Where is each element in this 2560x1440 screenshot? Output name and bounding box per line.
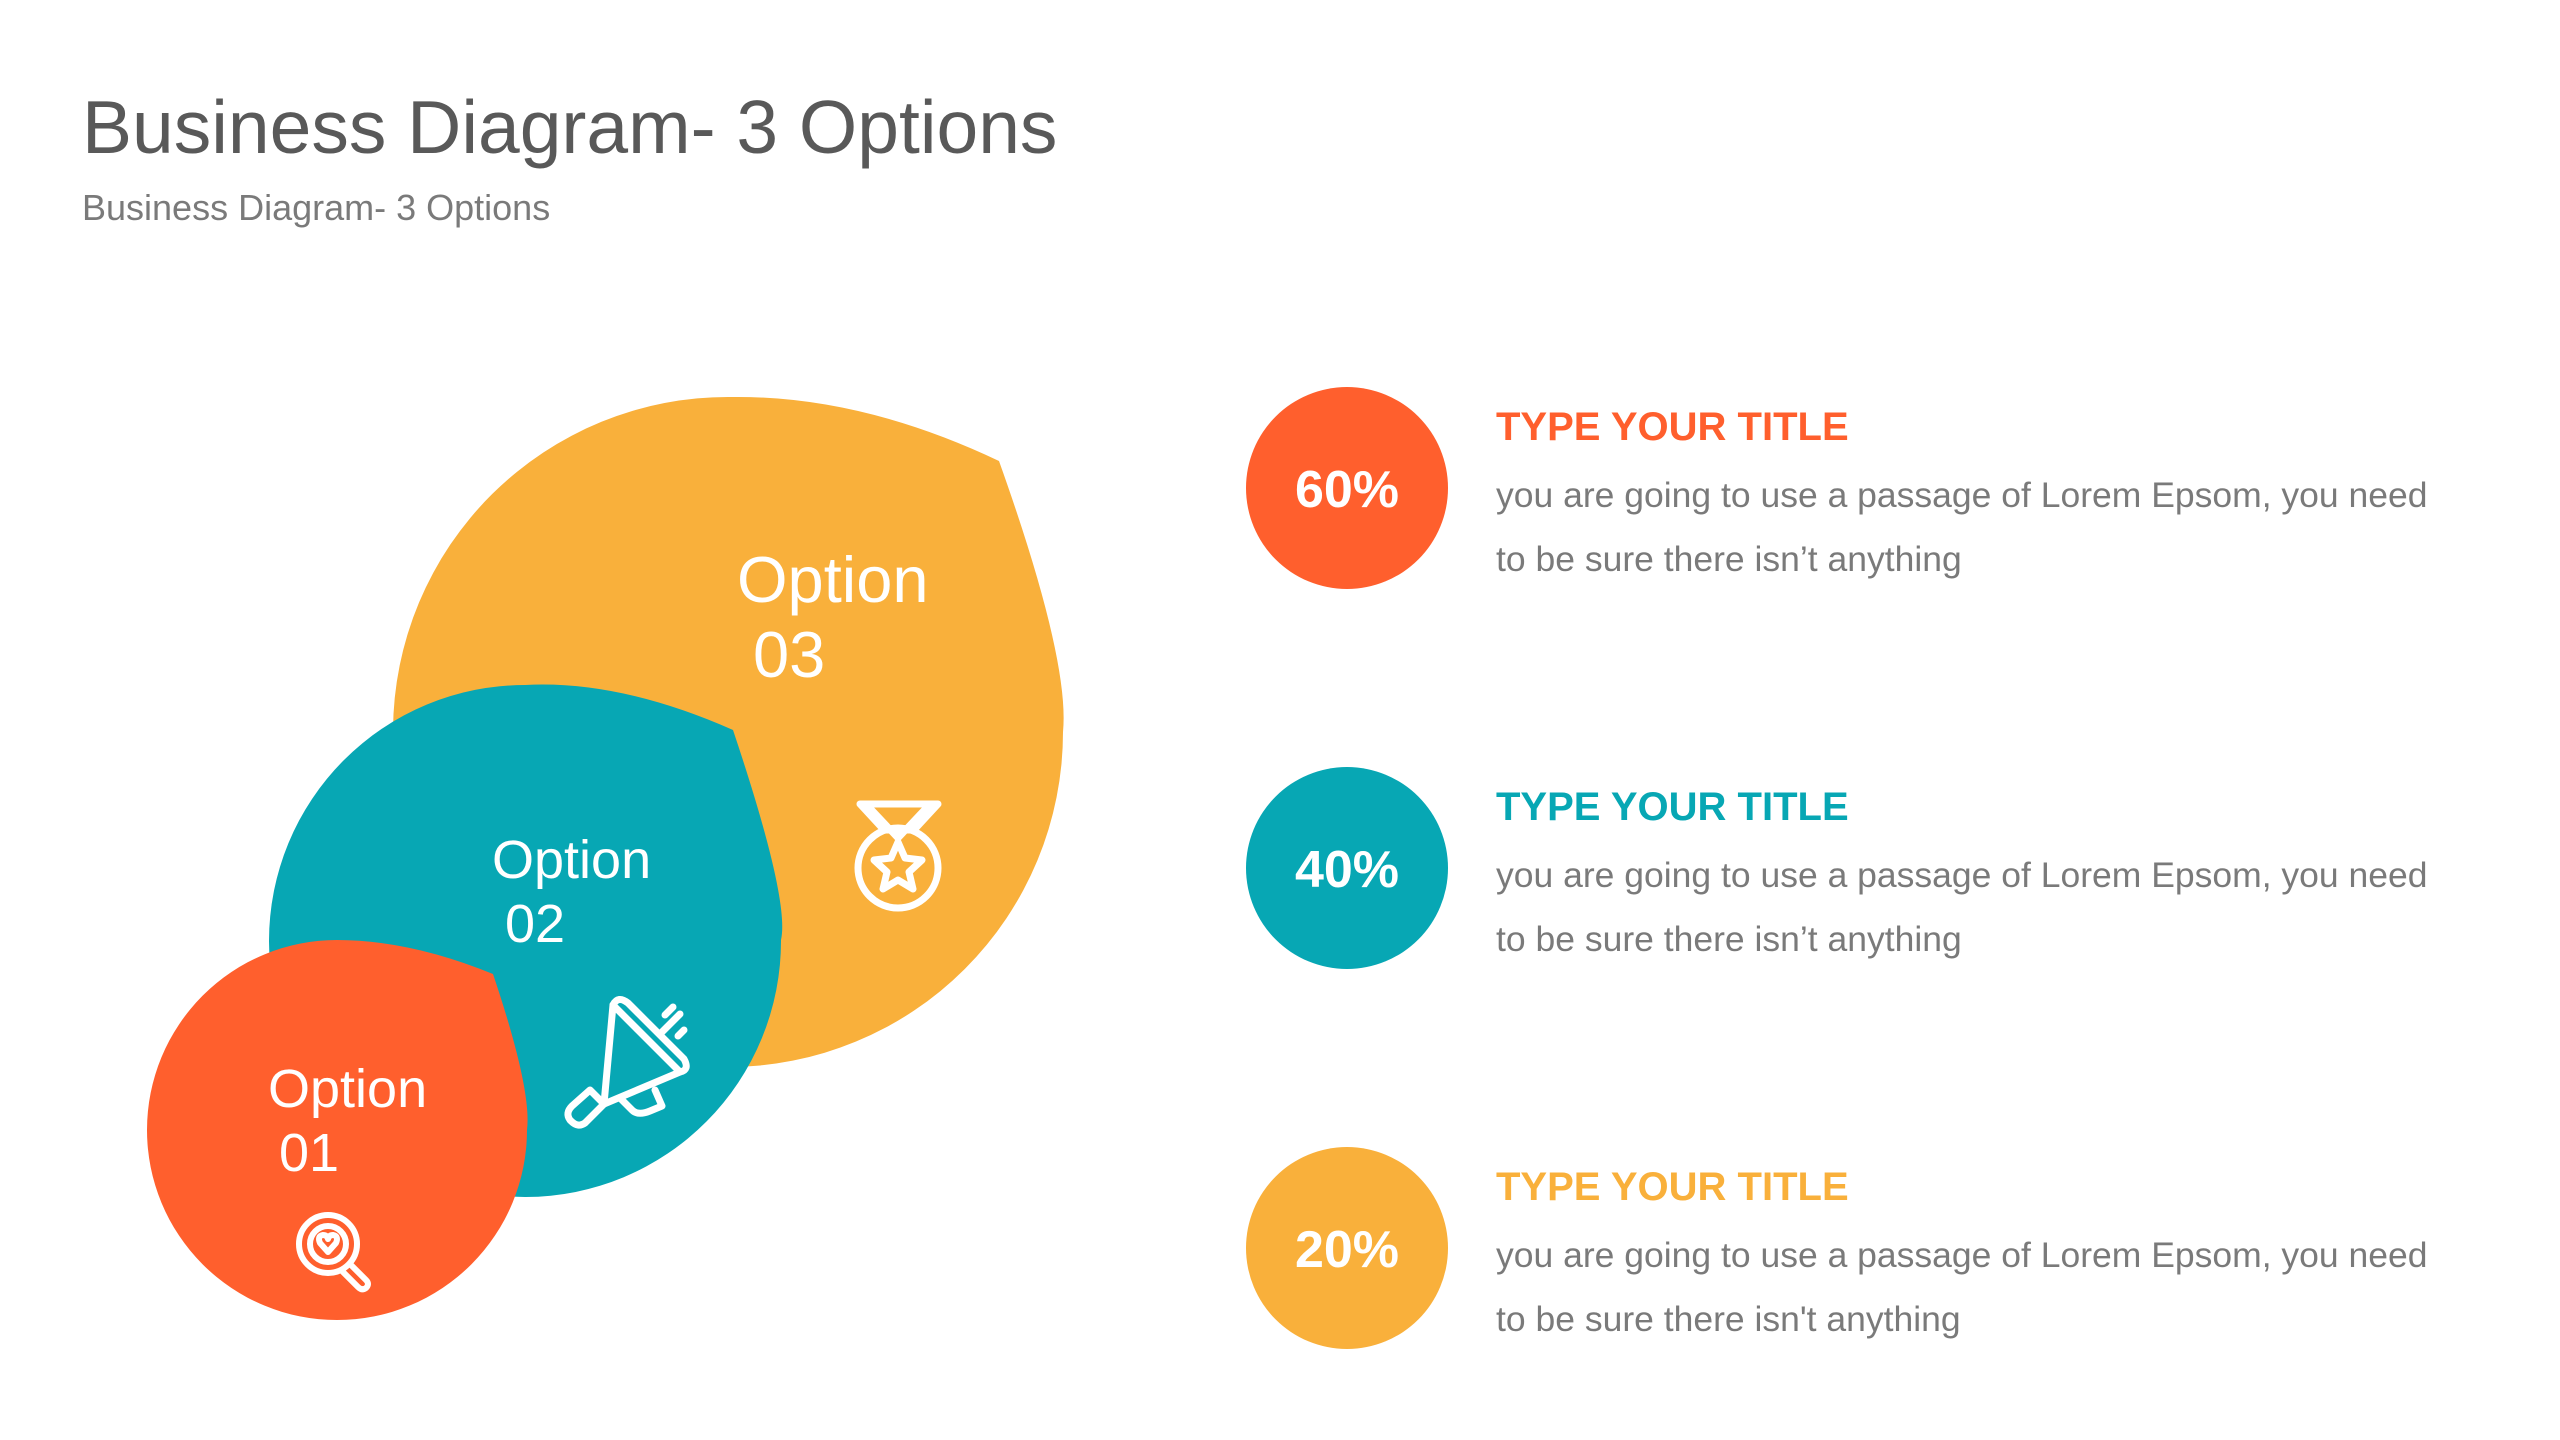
shape: option 01 (orange)	[147, 940, 528, 1320]
shape: option 02 (teal)	[269, 685, 782, 1197]
title: Business Diagram- 3 Options	[82, 85, 1057, 169]
item 2: 40%	[1246, 767, 2428, 969]
item title 1: TYPE YOUR TITLE	[1496, 405, 1849, 449]
badge: 60%	[1246, 387, 1448, 589]
icon: magnifier with heart	[299, 1215, 368, 1289]
badge: 20%: 20%	[1295, 1221, 1399, 1279]
item body 1: you are going to use a passage of Lorem Epsom, you need	[1496, 475, 2428, 515]
icon: medal	[858, 804, 938, 908]
item body 3: you are going to use a passage of Lorem Epsom, you need	[1496, 1235, 2428, 1275]
label: option 01: 01	[279, 1123, 339, 1183]
subtitle: Business Diagram- 3 Options	[82, 187, 550, 228]
item body 2: you are going to use a passage of Lorem Epsom, you need	[1496, 855, 2428, 895]
item body 2: to be sure there isn’t anything	[1496, 919, 1962, 959]
item 1: 60%	[1246, 387, 2428, 589]
badge: 60%: 60%	[1295, 461, 1399, 519]
label: option 02: Option	[492, 830, 651, 890]
icon: megaphone	[568, 999, 686, 1125]
item body 1: to be sure there isn’t anything	[1496, 539, 1962, 579]
label: option 03: Option	[737, 543, 929, 616]
badge: 40%: 40%	[1295, 841, 1399, 899]
label: option 02: 02	[505, 894, 565, 954]
label: option 01: Option	[268, 1059, 427, 1119]
item 3: 20%	[1246, 1147, 2428, 1349]
badge: 20%	[1246, 1147, 1448, 1349]
item body 3: to be sure there isn't anything	[1496, 1299, 1961, 1339]
label: option 03: 03	[753, 618, 825, 691]
badge: 40%	[1246, 767, 1448, 969]
item title 3: TYPE YOUR TITLE	[1496, 1165, 1849, 1209]
item title 2: TYPE YOUR TITLE	[1496, 785, 1849, 829]
shape: option 03 (yellow)	[393, 397, 1064, 1067]
